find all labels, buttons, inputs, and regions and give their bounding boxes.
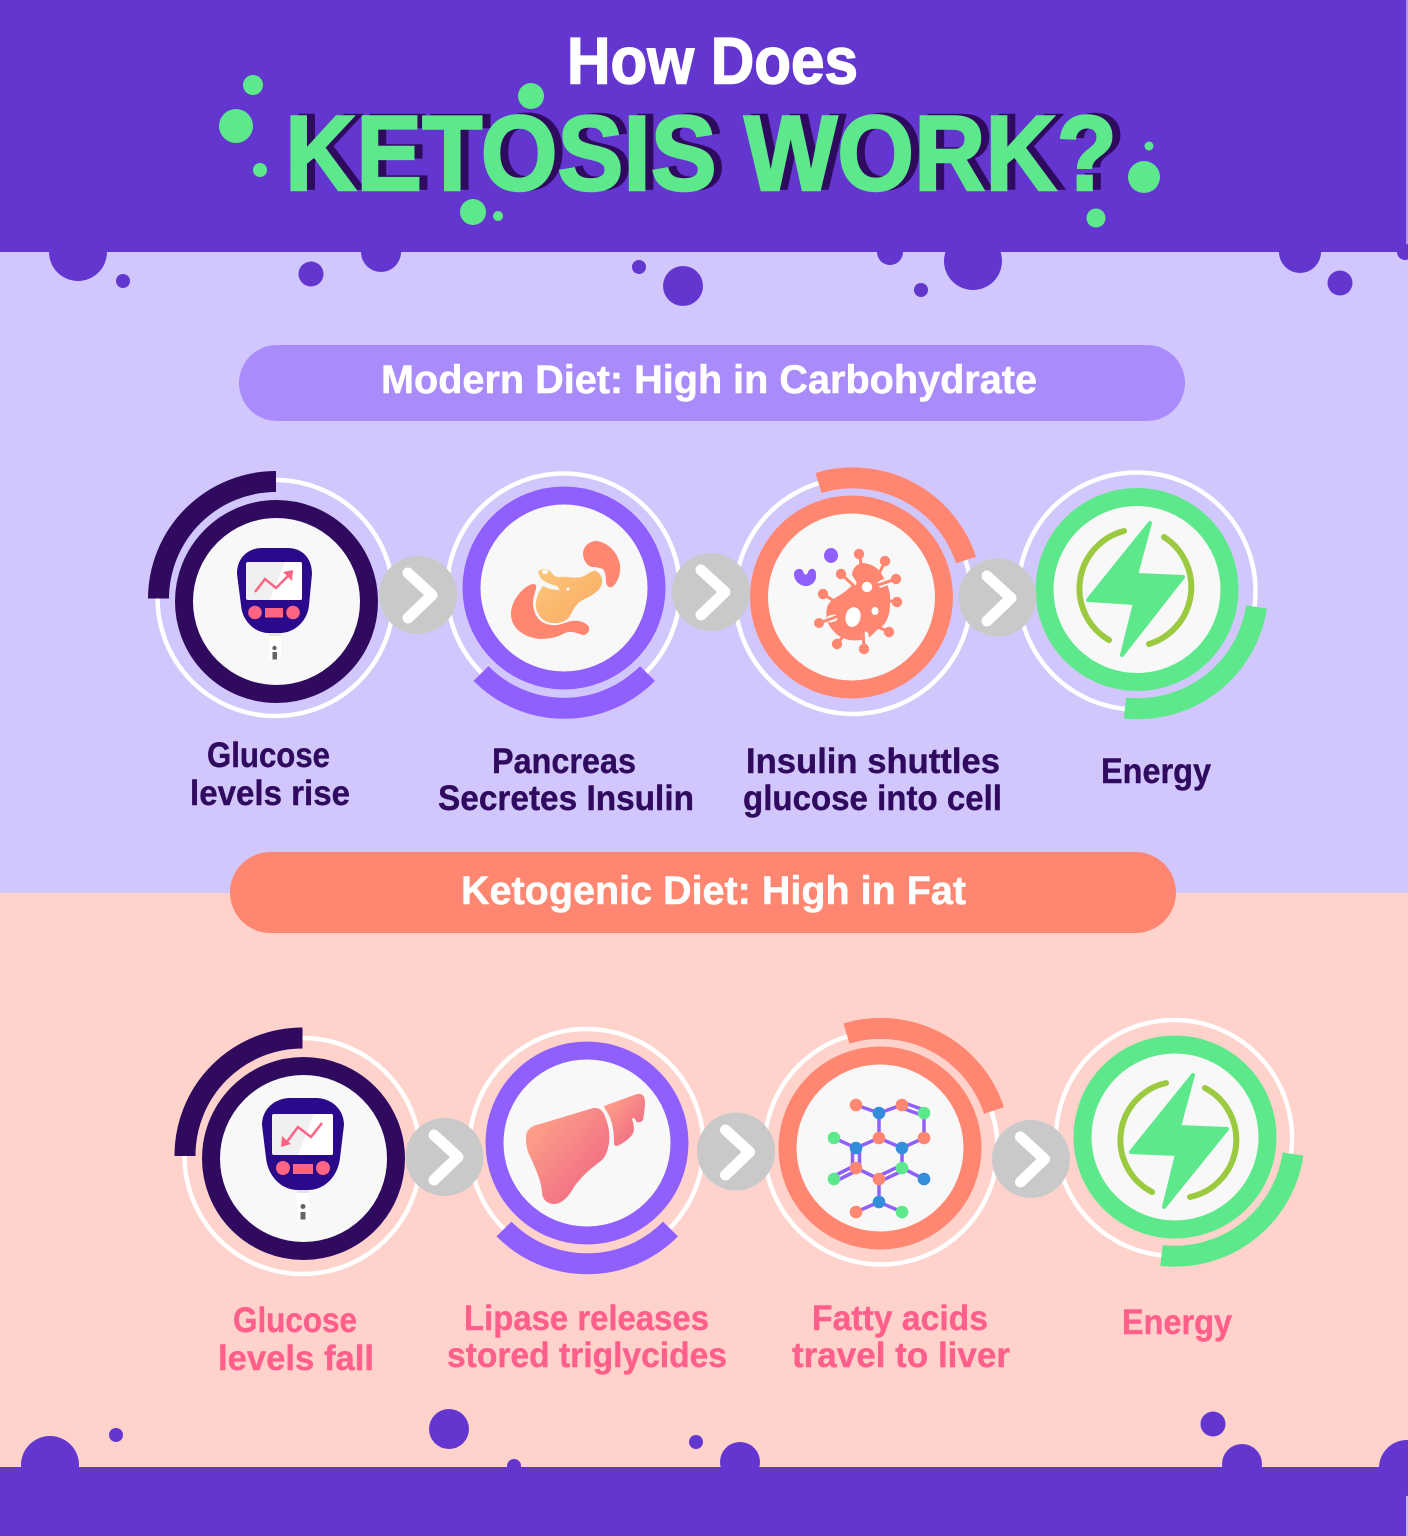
icon: lightning bolt <box>1079 523 1191 655</box>
heading: ketogenic diet: Ketogenic Diet: High in Fat <box>461 869 966 913</box>
arrow 5 <box>697 1112 775 1190</box>
label: pancreas secretes insulin <box>438 742 694 818</box>
heading: ketogenic diet <box>230 852 1176 933</box>
step: glucose levels rise <box>158 480 394 716</box>
arrow 3 <box>958 558 1036 636</box>
step: glucose levels fall <box>184 1038 420 1274</box>
header band <box>0 0 1408 306</box>
label: pancreas secretes insulin: Secretes Insulin <box>438 779 694 818</box>
label: glucose levels fall <box>218 1301 374 1378</box>
icon: fatty acid molecule <box>828 1099 930 1218</box>
label: lipase releases stored triglycides: stored triglycides <box>447 1336 727 1375</box>
label: glucose levels rise <box>190 736 350 813</box>
title: ketosis work: KETOSIS WORK? <box>293 92 1125 212</box>
label: fatty acids travel to liver <box>792 1299 1010 1375</box>
label: glucose levels fall: Glucose <box>233 1301 357 1340</box>
label: energy: Energy <box>1101 752 1211 791</box>
step: fatty acids travel to liver <box>764 1028 998 1264</box>
icon: lightning bolt <box>1120 1075 1236 1207</box>
title: ketosis work: KETOSIS WORK? <box>285 93 1117 213</box>
label: insulin shuttles glucose <box>743 742 1002 818</box>
step: insulin shuttles glucose into cell <box>735 478 971 714</box>
icon: glucose meter rising <box>237 548 312 660</box>
panel: ketogenic diet background <box>0 893 1408 1468</box>
label: insulin shuttles glucose: glucose into cell <box>743 779 1002 818</box>
step: pancreas secretes insulin <box>447 474 680 708</box>
arrow 1 <box>379 556 457 634</box>
footer band <box>0 1409 1408 1536</box>
step: lipase releases stored triglycides <box>470 1029 704 1264</box>
icon: glucose meter falling <box>262 1098 344 1220</box>
icon: liver <box>526 1094 645 1204</box>
icon: cell with glucose <box>794 548 902 654</box>
label: glucose levels rise: Glucose <box>207 736 330 775</box>
heading: modern diet <box>239 345 1185 421</box>
label: lipase releases stored triglycides: Lipase releases <box>464 1299 709 1338</box>
heading: modern diet: Modern Diet: High in Carbohydrate <box>381 358 1037 402</box>
arrow 6 <box>992 1120 1070 1198</box>
title: how does: How Does <box>567 24 858 98</box>
panel: modern diet background <box>0 252 1408 894</box>
label: glucose levels rise: levels rise <box>190 774 350 813</box>
icon: pancreas <box>511 541 620 639</box>
label: glucose levels fall: levels fall <box>218 1339 374 1378</box>
step: energy (ketogenic diet) <box>1056 1020 1293 1256</box>
label: energy: Energy <box>1122 1303 1232 1342</box>
decorative green dots around title <box>219 75 1160 228</box>
label: pancreas secretes insulin: Pancreas <box>492 742 636 781</box>
arrow 4 <box>406 1118 484 1196</box>
step: energy (modern diet) <box>1018 472 1256 710</box>
label: fatty acids travel to liver: Fatty acids <box>812 1299 988 1338</box>
label: lipase releases stored triglycides <box>447 1299 727 1375</box>
label: insulin shuttles glucose: Insulin shuttles <box>746 742 1000 781</box>
arrow 2 <box>672 553 750 631</box>
label: fatty acids travel to liver: travel to liver <box>792 1336 1010 1375</box>
